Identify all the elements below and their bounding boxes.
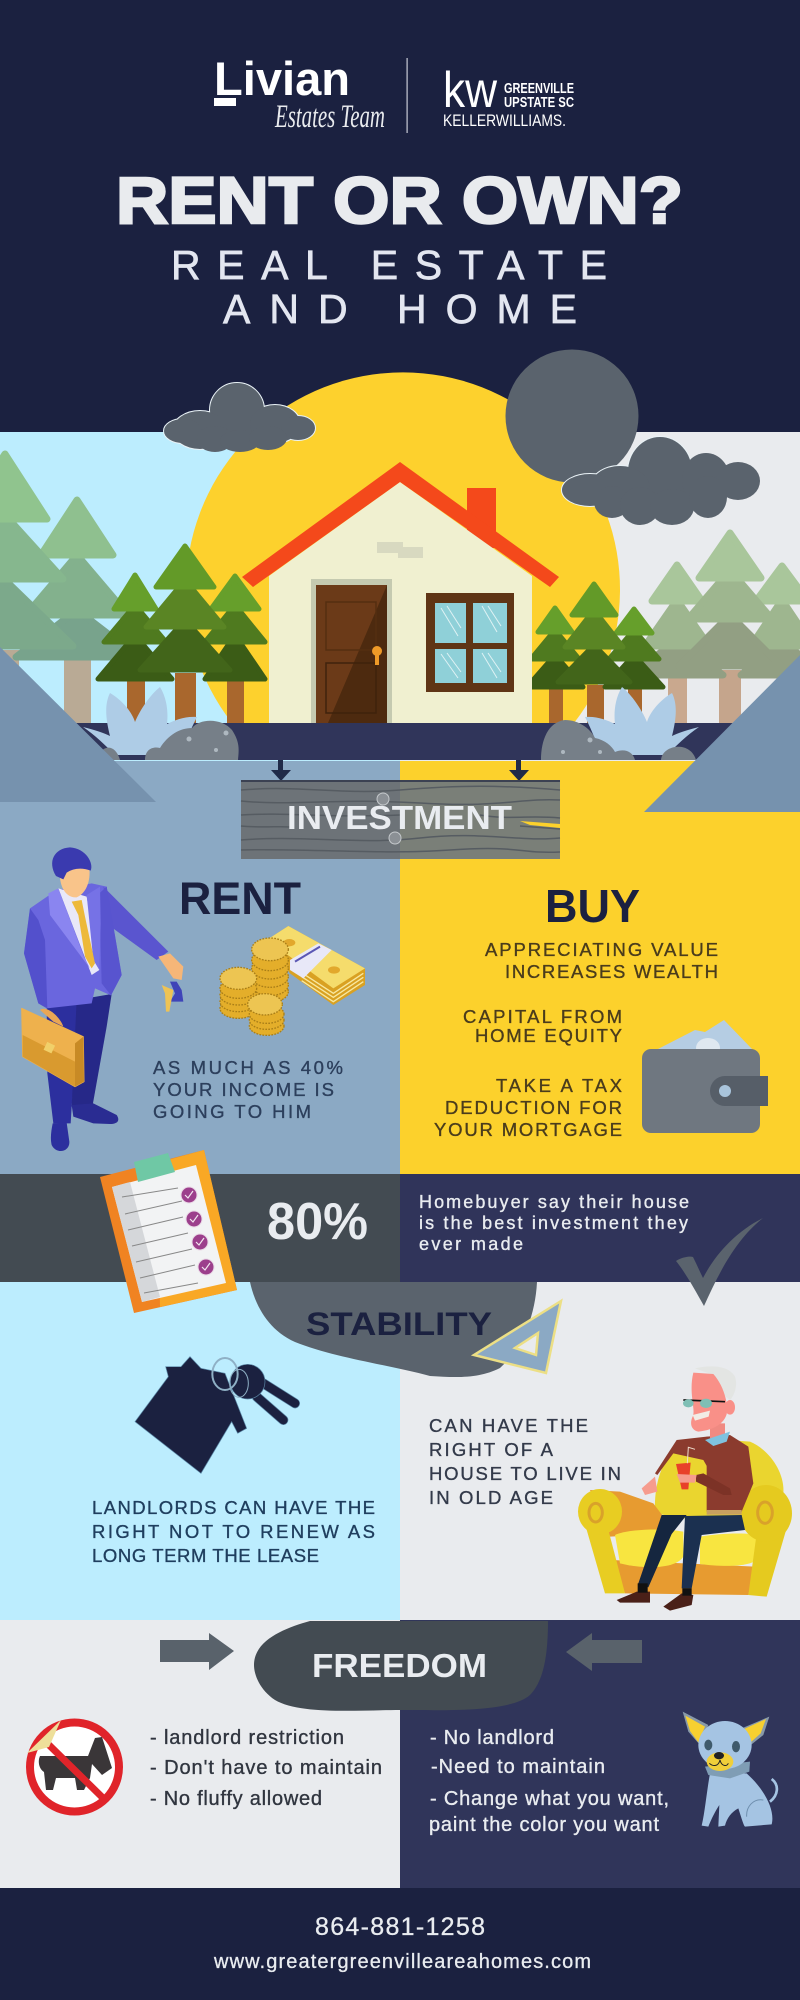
footer background <box>0 1888 800 2000</box>
buy text: capital from home equity: CAPITAL FROM <box>463 1006 622 1027</box>
checkmark <box>676 1218 763 1306</box>
heading: freedom: FREEDOM <box>312 1647 487 1684</box>
homebuyer text: is the best investment they <box>419 1213 688 1233</box>
rent text: GOING TO HIM <box>153 1101 311 1122</box>
old man in armchair <box>578 1366 792 1611</box>
freedom text: renting: - No fluffy allowed <box>150 1788 322 1810</box>
heading: buy: BUY <box>545 880 640 932</box>
background trees left <box>0 454 138 725</box>
panel: buy <box>400 761 800 1174</box>
panel: freedom right <box>400 1620 800 1888</box>
buy text: appreciating value: INCREASES WEALTH <box>505 961 718 982</box>
header background <box>0 0 800 432</box>
right cloud <box>562 437 760 525</box>
heading: stability: STABILITY <box>306 1306 492 1342</box>
left cloud <box>164 383 315 452</box>
subtitle: AND HOME <box>223 286 577 332</box>
freedom text: owning: - No landlord <box>430 1727 554 1749</box>
heading: rent: RENT <box>179 873 301 924</box>
logo: KW Greenville Upstate SC Keller Williams: UPSTATE SC <box>504 95 574 111</box>
freedom text: renting: - Don't have to maintain <box>150 1757 382 1779</box>
buy text: tax deduction: DEDUCTION FOR <box>445 1097 622 1118</box>
logo divider <box>406 58 408 133</box>
logo: Livian Estates Team: Livian <box>214 52 350 105</box>
old age text: HOUSE TO LIVE IN <box>429 1463 621 1484</box>
freedom text: owning: paint the color you want <box>429 1814 659 1836</box>
sun <box>186 372 620 723</box>
blob: stability heading <box>250 1282 537 1377</box>
logo: KW Greenville Upstate SC Keller Williams <box>443 62 574 130</box>
rent text <box>153 1057 343 1122</box>
heading: investment: INVESTMENT <box>287 799 512 836</box>
logo: KW Greenville Upstate SC Keller Williams: KELLERWILLIAMS. <box>443 111 566 130</box>
logo: KW Greenville Upstate SC Keller Williams: GREENVILLE <box>504 81 574 97</box>
door <box>311 579 392 723</box>
wooden sign <box>241 780 560 859</box>
stat: 80%: 80% <box>267 1193 368 1251</box>
subtitle: REAL ESTATE <box>171 242 607 288</box>
right pine trees <box>527 584 663 725</box>
buy text: tax deduction: YOUR MORTGAGE <box>434 1119 622 1140</box>
freedom text: owning <box>429 1727 669 1836</box>
house keychain <box>135 1357 295 1473</box>
ground <box>70 723 735 760</box>
freedom text: renting: - landlord restriction <box>150 1727 344 1749</box>
buy text: appreciating value: APPRECIATING VALUE <box>485 939 718 960</box>
sky left <box>0 432 400 762</box>
logo: KW Greenville Upstate SC Keller Williams: kw <box>443 62 498 118</box>
subtitle <box>171 242 607 332</box>
landlords text: RIGHT NOT TO RENEW AS <box>92 1521 375 1542</box>
no pets sign <box>27 1720 119 1812</box>
logo: Livian Estates Team: Estates Team <box>274 99 385 135</box>
freedom text: renting <box>150 1727 382 1810</box>
panel: stability right <box>400 1282 800 1620</box>
sky right <box>400 432 800 762</box>
buy text: appreciating value <box>485 939 718 982</box>
ruler triangle <box>474 1301 561 1373</box>
left bushes and rocks <box>83 687 239 760</box>
house <box>242 462 559 723</box>
rent text: YOUR INCOME IS <box>153 1079 334 1100</box>
freedom text: owning: - Change what you want, <box>430 1788 669 1810</box>
arrow: left to sign <box>271 760 291 781</box>
old age text <box>429 1415 621 1508</box>
clipboard with checklist <box>100 1150 237 1313</box>
panel: rent <box>0 761 400 1174</box>
window <box>426 593 514 692</box>
moon <box>506 350 638 482</box>
arrow: left-pointing <box>566 1633 642 1671</box>
dog <box>683 1712 777 1827</box>
rent text: AS MUCH AS 40% <box>153 1057 343 1078</box>
buy text: capital from home equity <box>463 1006 622 1046</box>
old age text: IN OLD AGE <box>429 1487 553 1508</box>
website: www.greatergreenvilleareahomes.com <box>213 1951 591 1973</box>
landlords text: LANDLORDS CAN HAVE THE <box>92 1497 375 1518</box>
left pine trees <box>98 546 265 725</box>
buy text: tax deduction: TAKE A TAX <box>496 1075 622 1096</box>
landlords text <box>92 1497 375 1566</box>
homebuyer text: Homebuyer say their house <box>419 1192 689 1212</box>
buy text: tax deduction <box>434 1075 622 1140</box>
panel: 80% band left <box>0 1174 400 1282</box>
landlords text: LONG TERM THE LEASE <box>92 1545 319 1566</box>
arrow: right to sign <box>509 760 529 781</box>
right mountain <box>644 655 800 812</box>
businessman with keys <box>22 847 183 1151</box>
panel: 80% band right <box>400 1174 800 1282</box>
background trees right <box>631 533 800 725</box>
left mountain <box>0 647 156 802</box>
homebuyer text: ever made <box>419 1234 523 1254</box>
title: RENT OR OWN? <box>116 163 683 237</box>
arrow: right-pointing <box>160 1633 234 1670</box>
freedom text: owning: -Need to maintain <box>431 1756 605 1778</box>
money: coins and banknotes <box>220 926 365 1035</box>
buy text: capital from home equity: HOME EQUITY <box>475 1025 622 1046</box>
wallet <box>642 1020 768 1133</box>
homebuyer text <box>419 1192 689 1254</box>
panel: freedom left <box>0 1620 400 1888</box>
old age text: RIGHT OF A <box>429 1439 554 1460</box>
old age text: CAN HAVE THE <box>429 1415 588 1436</box>
right bushes and rocks <box>541 687 699 760</box>
logo: Livian Estates Team <box>214 52 385 135</box>
blob: freedom heading <box>254 1621 548 1711</box>
panel: stability left <box>0 1282 400 1620</box>
phone number: 864-881-1258 <box>315 1913 485 1941</box>
